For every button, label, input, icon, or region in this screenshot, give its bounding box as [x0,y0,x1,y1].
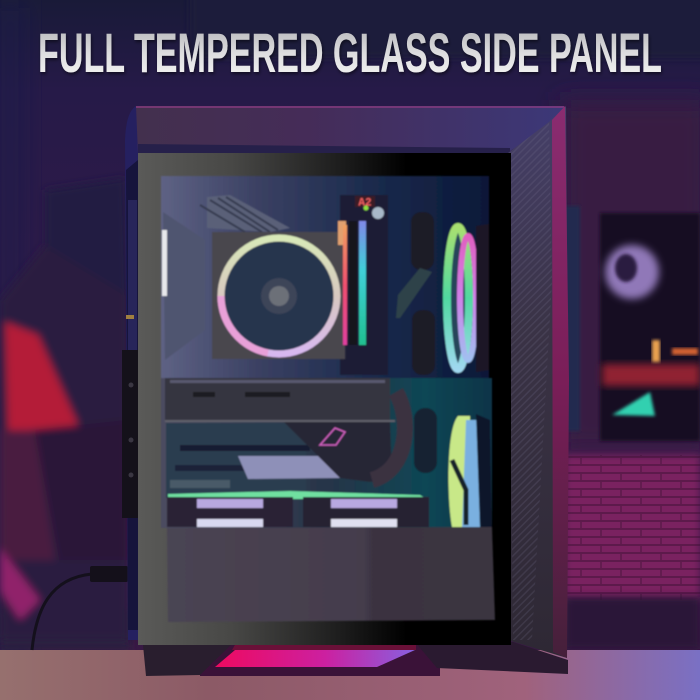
monitor on desk [562,206,700,441]
cable plug [90,566,128,582]
motherboard strip right of RAM [340,195,388,375]
top panel [136,106,564,153]
chipset heatsink [238,456,340,479]
CPU cooler block [212,232,345,359]
power cable [32,574,128,650]
interior through glass [161,176,495,622]
left VRM block [163,212,205,360]
cable grommets [411,212,437,473]
case rear edge with IO strip [122,106,145,640]
gaming chair [0,178,128,640]
right mesh front panel [508,106,569,658]
status LED [364,206,368,210]
motherboard lower with slots [166,423,310,498]
wooden table [0,650,700,700]
stand feet [143,642,568,676]
bottom fans on shroud [167,491,429,527]
upper chamber [161,176,489,378]
POST code display [355,196,375,210]
rear fan bottom [448,414,492,527]
under-case RGB glow [200,640,440,676]
ROG shroud [284,422,392,482]
cooler fan [221,238,337,354]
rear fan top [446,224,489,372]
glass panel frame [138,153,511,645]
motherboard heatsink [207,195,290,232]
cable bundle upper [396,268,432,318]
power cable bundle [372,392,405,480]
RAM RGB sticks [338,221,366,345]
PSU shroud [167,527,495,622]
PC case [122,106,569,676]
POST code display: A2 [358,198,372,210]
graphics card [165,378,395,422]
